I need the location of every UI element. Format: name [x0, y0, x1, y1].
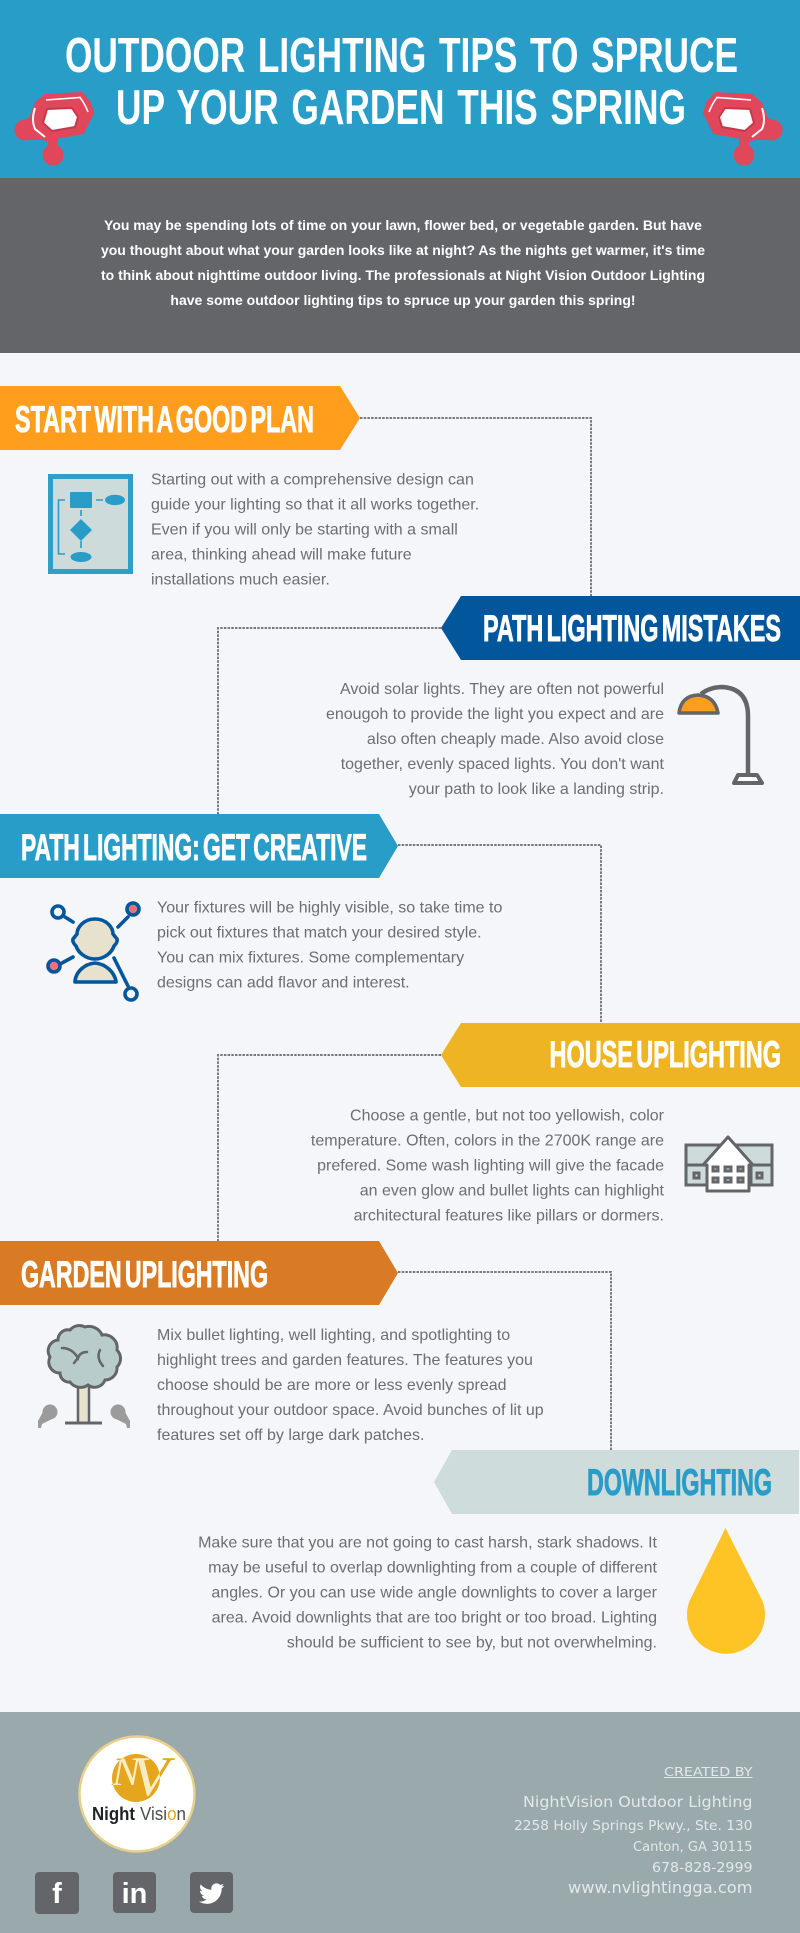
text: garden: highlight trees and garden features. The features you — [157, 1352, 533, 1369]
text: plan: Starting out with a comprehensive design can — [151, 472, 474, 488]
text: plan: installations much easier. — [151, 572, 330, 588]
connector lines — [218, 418, 611, 1450]
icon: twitter — [190, 1872, 233, 1913]
intro panel: have some outdoor lighting tips to spruce up your garden this spring! — [170, 292, 636, 308]
logo: N — [111, 1749, 142, 1794]
banner: path lighting get creative — [0, 814, 398, 878]
section: downlighting — [198, 1450, 799, 1654]
text: house — [311, 1108, 665, 1224]
contact details: Canton, GA 30115 — [633, 1839, 752, 1855]
intro panel: to think about nighttime outdoor living. The professionals at Night Vision Outdoor Lighting — [101, 267, 705, 283]
intro panel: You may be spending lots of time on your lawn, flower bed, or vegetable garden. But have — [104, 217, 702, 233]
intro panel: you thought about what your garden looks like at night? As the nights get warmer, it's time — [101, 242, 705, 258]
text: plan: Even if you will only be starting with a small — [151, 522, 458, 538]
logo: V — [131, 1746, 175, 1808]
banner: start with a good plan: START WITH A GOOD PLAN — [15, 399, 314, 440]
icon: facebook — [35, 1872, 79, 1914]
text: house: temperature. Often, colors in the 2700K range are — [311, 1132, 664, 1150]
text: garden: features set off by large dark patches. — [157, 1427, 424, 1444]
text: downlighting: area. Avoid downlights that are too bright or too broad. Lighting — [212, 1610, 657, 1626]
text: path mistakes: Avoid solar lights. They are often not powerful — [340, 681, 664, 698]
text: plan: guide your lighting so that it all works together. — [151, 496, 479, 514]
header panel — [0, 0, 800, 178]
banner: path lighting get creative: PATH LIGHTING: GET CREATIVE — [21, 827, 367, 868]
text: path mistakes: your path to look like a landing strip. — [409, 781, 664, 798]
text: get creative: You can mix fixtures. Some complementary — [157, 950, 464, 966]
text: downlighting — [198, 1534, 658, 1652]
text: path mistakes — [326, 681, 665, 798]
section: house uplighting — [311, 1023, 800, 1224]
icon: left spotlight — [14, 93, 93, 166]
banner: house uplighting — [441, 1023, 800, 1087]
text: garden: Mix bullet lighting, well lighting, and spotlighting to — [157, 1327, 510, 1344]
text: get creative: designs can add flavor and interest. — [157, 974, 410, 992]
text: path mistakes: together, evenly spaced lights. You don't want — [341, 756, 665, 773]
banner: start with a good plan — [0, 386, 360, 450]
banner: garden uplighting — [0, 1241, 398, 1305]
icon: house — [686, 1137, 772, 1191]
logo: V — [131, 1746, 175, 1808]
section: path lighting mistakes — [326, 596, 800, 798]
icon: flowchart — [50, 476, 130, 572]
contact details: 678-828-2999 — [652, 1860, 752, 1876]
text: plan: area, thinking ahead will make future — [151, 546, 412, 564]
text: garden — [157, 1327, 544, 1444]
text: garden: throughout your outdoor space. Avoid bunches of lit up — [157, 1402, 544, 1419]
logo: N — [111, 1749, 142, 1794]
contact details: CREATED BY — [664, 1764, 753, 1779]
intro panel — [0, 178, 800, 353]
section: start with a good plan — [0, 386, 479, 588]
logo — [80, 1736, 194, 1852]
section: path lighting get creative — [0, 814, 502, 1000]
banner: downlighting — [434, 1450, 799, 1514]
text: downlighting: should be sufficient to see by, but not overwhelming. — [287, 1634, 657, 1652]
contact details — [514, 1764, 753, 1897]
text: path mistakes: also often cheaply made. Also avoid close — [367, 731, 664, 748]
icon: light drop — [687, 1528, 765, 1654]
icon: facebook: f — [52, 1878, 62, 1910]
icon: linkedin: in — [122, 1878, 147, 1910]
contact details: NightVision Outdoor Lighting — [523, 1793, 752, 1811]
text: house: Choose a gentle, but not too yellowish, color — [350, 1108, 665, 1124]
contact details: www.nvlightingga.com — [568, 1878, 752, 1897]
icon: person with nodes — [48, 903, 139, 1000]
icon: linkedin — [113, 1872, 156, 1913]
icon: path lamp — [679, 687, 762, 783]
text: get creative: pick out fixtures that match your desired style. — [157, 924, 482, 942]
icon: right spotlight — [704, 93, 782, 166]
text: house: prefered. Some wash lighting will give the facade — [317, 1158, 664, 1174]
text: garden: choose should be are more or less evenly spread — [157, 1377, 507, 1394]
icon: tree with spotlights — [38, 1326, 130, 1428]
footer panel — [0, 1712, 800, 1933]
text: downlighting: angles. Or you can use wide angle downlights to cover a larger — [211, 1584, 658, 1602]
logo: Night — [92, 1804, 135, 1824]
text: downlighting: may be useful to overlap downlighting from a couple of different — [208, 1560, 658, 1576]
contact details: 2258 Holly Springs Pkwy., Ste. 130 — [514, 1818, 752, 1834]
text: path mistakes: enougoh to provide the light you expect and are — [326, 706, 664, 723]
text: get creative: Your fixtures will be highly visible, so take time to — [157, 900, 502, 916]
title — [65, 29, 738, 135]
logo: Vision — [140, 1804, 186, 1824]
text: plan — [151, 472, 479, 588]
text: get creative — [157, 900, 502, 992]
text: house: architectural features like pillars or dormers. — [354, 1208, 664, 1224]
text: house: an even glow and bullet lights can highlight — [360, 1182, 665, 1200]
banner: path lighting mistakes — [441, 596, 800, 660]
text: downlighting: Make sure that you are not going to cast harsh, stark shadows. It — [198, 1534, 658, 1552]
banner: garden uplighting: GARDEN UPLIGHTING — [21, 1254, 268, 1295]
section: garden uplighting — [0, 1241, 544, 1444]
